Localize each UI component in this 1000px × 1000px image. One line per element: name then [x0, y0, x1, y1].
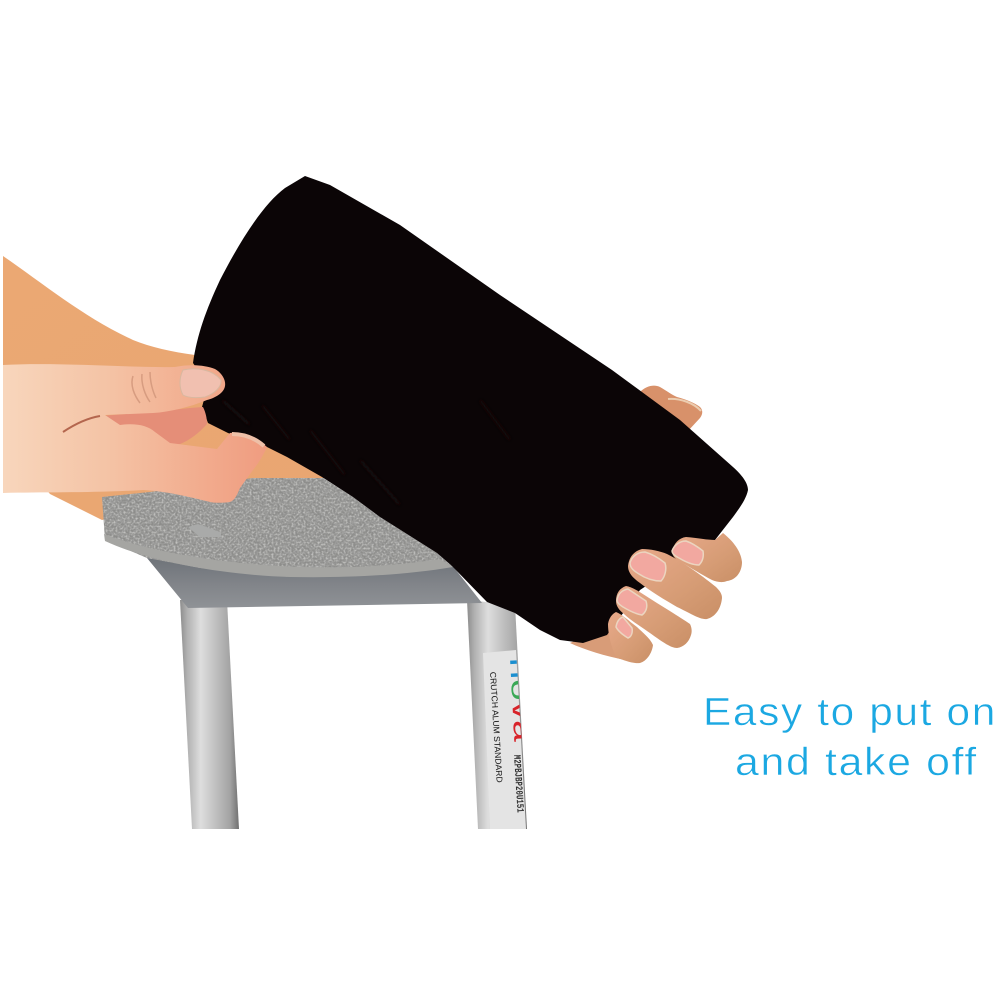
label barcode text: M2PBJBP20U151 [510, 755, 525, 813]
index finger in shadow [100, 407, 207, 445]
lower fingertip [232, 434, 264, 446]
knuckle creases [132, 372, 156, 403]
left hand gripping the cover [3, 364, 267, 503]
top fingertip of right hand behind the cover [640, 386, 702, 431]
armrest front lip [104, 534, 453, 577]
fingernails [616, 541, 703, 638]
index finger [672, 533, 742, 582]
armrest dent [188, 524, 222, 537]
palm and thumb [3, 364, 267, 503]
caption line 1: Easy to put on [703, 691, 997, 734]
left aluminium leg [180, 600, 239, 829]
black cushion cover [193, 176, 748, 643]
crutch legs [180, 600, 527, 829]
caption [703, 691, 997, 784]
product label on right leg [483, 650, 526, 829]
armrest top pad [102, 478, 453, 577]
infographic scene [3, 176, 993, 829]
gathered elastic folds [222, 400, 510, 505]
right aluminium leg [467, 600, 527, 829]
fingers of right hand in front of the cover [608, 533, 742, 663]
ring finger [616, 586, 692, 648]
crease between thumb and palm [63, 416, 100, 432]
palm sliver of right hand [570, 625, 625, 660]
fingernail edge [668, 399, 701, 411]
little finger [608, 612, 653, 663]
armrest underside [147, 558, 482, 608]
thumb nail [180, 369, 221, 398]
label text: product name: CRUTCH ALUM STANDARD [488, 672, 505, 783]
middle finger [628, 549, 722, 619]
caption line 2: and take off [735, 741, 978, 784]
label text: brand: n o va [504, 657, 538, 744]
forearm behind the hand [3, 256, 330, 520]
